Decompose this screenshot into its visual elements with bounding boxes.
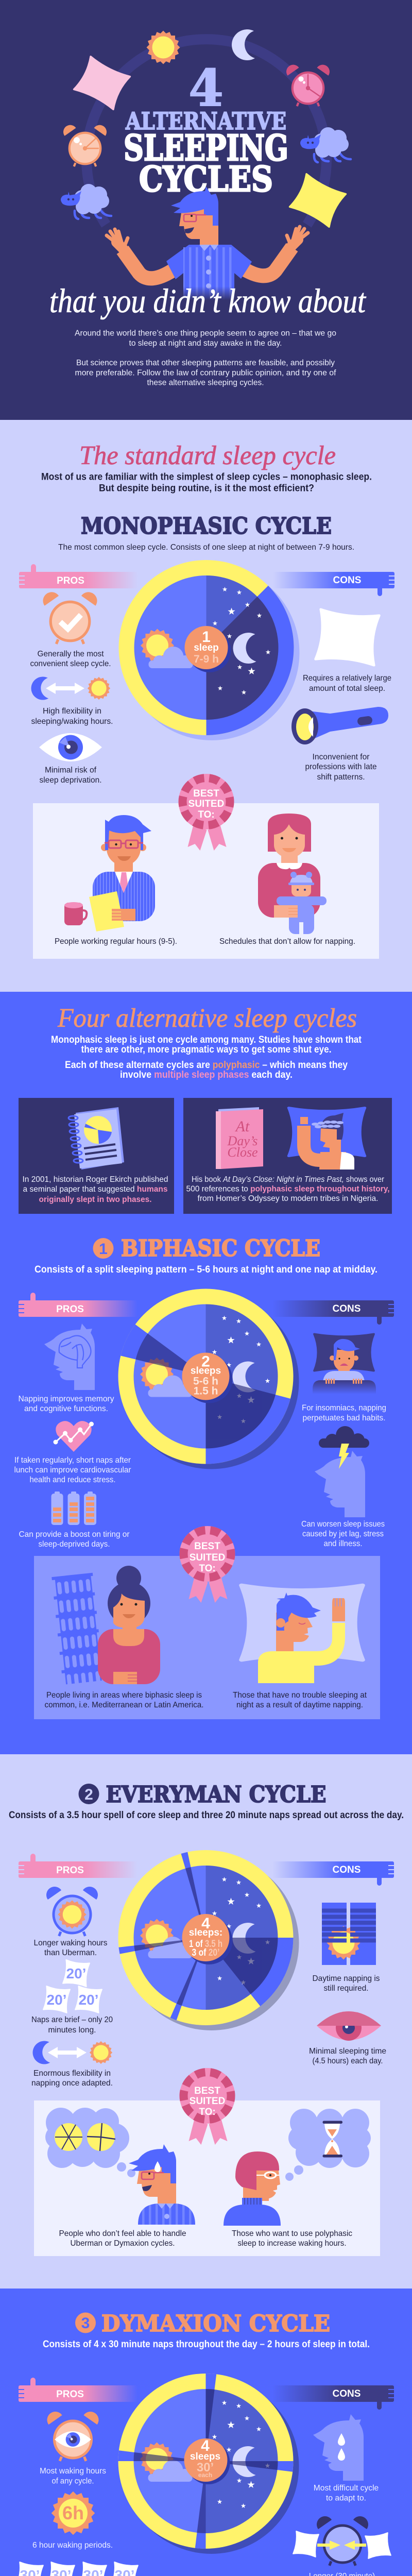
- pros bar: [19, 2378, 138, 2402]
- con: jet lag: caused by jet lag, stress: [302, 1530, 384, 1538]
- con: minimal sleeping time: Minimal sleeping time: [309, 2047, 386, 2056]
- con: minimal sleeping time: [309, 2011, 386, 2065]
- cons bar: CONS: [333, 1865, 360, 1875]
- icon: notebook: [68, 1107, 124, 1170]
- cons bar: CONS: [333, 575, 361, 586]
- icon: sheep right: [300, 127, 351, 162]
- icon: sun: [146, 30, 180, 64]
- pro: flexibility: Enormous flexibility in: [33, 2069, 111, 2078]
- title: ALTERNATIVE: [125, 107, 286, 135]
- con: most difficult: Most difficult cycle: [314, 2484, 379, 2493]
- intro text: these alternative sleeping cycles.: [147, 378, 264, 387]
- person: anxious man with thought: Uberman or Dymaxion cycles.: [70, 2239, 175, 2248]
- person: office worker: [55, 815, 177, 946]
- intro text: more preferable. Follow the law of contrary public opinion, and try one of: [75, 369, 336, 377]
- wheel: monophasic: 1: [202, 629, 211, 646]
- wheel: everyman: 3 of 20’: [192, 1947, 219, 1958]
- wheel: biphasic: sleeps: [191, 1365, 221, 1377]
- heading: The standard sleep cycle: [79, 441, 336, 470]
- intro text: to sleep at night and stay awake in the day.: [129, 339, 282, 348]
- icon: book: Day’s: [227, 1133, 258, 1148]
- panel: Roger Ekirch: originally slept in two phases.: [39, 1195, 151, 1204]
- con: daytime napping: [312, 1903, 380, 1993]
- pro: four naps: [16, 2562, 138, 2576]
- con: late shifts: professions with late: [305, 762, 377, 771]
- person: woman with hourglass thought: [224, 2109, 371, 2248]
- wheel: dymaxion: [118, 2374, 299, 2554]
- wheel: monophasic: [118, 560, 300, 740]
- cycle description: Consists of a split sleeping pattern – 5-6 hours at night and one nap at midday.: [35, 1264, 377, 1275]
- intro text: But science proves that other sleeping patterns are feasible, and possibly: [76, 359, 335, 367]
- pro: brief naps: 20’: [66, 1965, 86, 1981]
- pro: brief naps: 20’: [79, 1992, 98, 2008]
- heading: Four alternative sleep cycles: [57, 1004, 357, 1033]
- wheel: dymaxion: 30’: [197, 2461, 214, 2475]
- panel: Roger Ekirch: a seminal paper that suggested humans: [23, 1185, 168, 1194]
- cons bar: CONS: [333, 2388, 360, 2399]
- wheel: dymaxion: sleeps: [190, 2451, 220, 2462]
- cons bar: [272, 2385, 394, 2410]
- pro: convenient: Generally the most: [37, 650, 104, 658]
- person: sleeping man: [233, 1585, 367, 1709]
- wheel: everyman: [118, 1850, 299, 2030]
- pro: six hour periods: 6 hour waking periods.: [32, 2541, 113, 2550]
- badge: best suited: BEST: [194, 2086, 220, 2096]
- pro: flexibility: sleeping/waking hours.: [31, 717, 113, 726]
- con: jet lag: and illness.: [323, 1539, 363, 1548]
- badge: best suited: BEST: [193, 788, 219, 799]
- con: insomniacs: [302, 1334, 386, 1422]
- person: Mediterranean woman and tower: [44, 1566, 204, 1709]
- intro text: [75, 329, 336, 387]
- badge: best suited: SUITED: [188, 799, 224, 809]
- pro: boost: Can provide a boost on tiring or: [19, 1530, 130, 1539]
- cycle title: everyman: 2: [84, 1786, 93, 1803]
- intro text: [41, 472, 372, 494]
- title: [124, 59, 288, 199]
- wheel: biphasic: 5-6 h: [193, 1376, 218, 1387]
- pro: most waking hours: [40, 2409, 106, 2485]
- pro: minimal risk: sleep deprivation.: [39, 776, 102, 785]
- panel: At Day's Close: 500 references to polyphasic sleep throughout history,: [186, 1185, 389, 1193]
- icon: book: Close: [227, 1145, 258, 1160]
- badge: best suited: BEST: [194, 1541, 220, 1552]
- section: alternative cycles and biphasic: [0, 992, 412, 1754]
- icon: pink alarm clock: [284, 62, 332, 107]
- person: woman with hourglass thought: Those who want to use polyphasic: [232, 2229, 352, 2238]
- pro: heart health: If taken regularly, short naps after: [14, 1456, 131, 1465]
- intro text: But despite being routine, is it the most efficient?: [99, 483, 314, 494]
- badge: best suited: [179, 1526, 235, 1603]
- con: jet lag: [301, 1426, 385, 1548]
- pro: longer waking hours: [34, 1884, 107, 1957]
- badge: best suited: TO:: [199, 1563, 216, 1574]
- title: 4: [188, 59, 224, 117]
- icon: sleeping Greek on pillow: [289, 1108, 365, 1170]
- intro text: involve multiple sleep phases each day.: [120, 1070, 293, 1080]
- subtitle: that you didn’t know about: [49, 282, 366, 320]
- cons bar: CONS: [333, 1303, 360, 1314]
- con: late shifts: [291, 707, 388, 782]
- pro: longer waking hours: than Uberman.: [44, 1948, 97, 1957]
- panel: At Day's Close: His book At Day’s Close: Night in Times Past, shows over: [192, 1175, 385, 1184]
- illustration: juggling man: [107, 187, 308, 300]
- intro text: Monophasic sleep is just one cycle among many. Studies have shown that: [51, 1035, 362, 1045]
- icon: pink pillow: [74, 57, 130, 109]
- cycle title: biphasic: 1: [99, 1241, 108, 1258]
- intro text: Around the world there’s one thing people seem to agree on – that we go: [75, 329, 336, 338]
- con: late shifts: Inconvenient for: [312, 753, 370, 761]
- wheel: everyman: 4: [201, 1915, 210, 1932]
- pro: six hour periods: [32, 2492, 113, 2550]
- badge: best suited: [179, 2068, 235, 2145]
- badge: best suited: TO:: [199, 2107, 216, 2117]
- pros bar: PROS: [57, 575, 84, 586]
- section: dymaxion: [0, 2289, 412, 2576]
- panel: Roger Ekirch: [19, 1098, 174, 1214]
- wheel: monophasic: 7-9 h: [194, 653, 219, 665]
- pro: flexibility: [31, 677, 113, 726]
- con: insomniacs: perpetuates bad habits.: [303, 1414, 385, 1422]
- wheel: biphasic: 1.5 h: [194, 1385, 218, 1397]
- panel: best suited: [34, 1556, 380, 1719]
- person: Mediterranean woman and tower: People living in areas where biphasic sleep is: [46, 1691, 202, 1700]
- cycle description: Consists of 4 x 30 minute naps throughout the day – 2 hours of sleep in total.: [43, 2339, 370, 2350]
- intro text: there are other, more pragmatic ways to get some shut eye.: [81, 1044, 332, 1055]
- icon: yellow pillow: [290, 174, 346, 227]
- pro: brief naps: minutes long.: [48, 2026, 96, 2035]
- panel: best suited: [33, 803, 379, 959]
- badge: best suited: TO:: [198, 809, 215, 820]
- person: anxious man with thought: [45, 2108, 195, 2248]
- con: daytime napping: Daytime napping is: [312, 1974, 380, 1983]
- con: large amount: [303, 609, 391, 693]
- con: daytime napping: still required.: [323, 1984, 369, 1993]
- pro: boost: [19, 1492, 130, 1549]
- pro: brief naps: Naps are brief – only 20: [31, 2015, 113, 2024]
- intro text: Most of us are familiar with the simplest of sleep cycles – monophasic sleep.: [41, 472, 372, 482]
- pro: heart health: health and reduce stress.: [30, 1476, 115, 1484]
- cycle title: dymaxion: DYMAXION CYCLE: [101, 2311, 330, 2337]
- pro: heart health: [14, 1421, 131, 1484]
- wheel: biphasic: 2: [201, 1353, 210, 1370]
- cycle title: MONOPHASIC CYCLE: [81, 513, 332, 539]
- person: anxious man with thought: People who don’t feel able to handle: [59, 2229, 186, 2238]
- pro: longer waking hours: Longer waking hours: [34, 1939, 107, 1947]
- con: most difficult: to adapt to.: [326, 2494, 366, 2503]
- pro: most waking hours: of any cycle.: [52, 2477, 94, 2485]
- intro text: Each of these alternate cycles are polyphasic – which means they: [65, 1060, 348, 1071]
- pro: convenient: convenient sleep cycle.: [30, 659, 111, 668]
- pro: memory: [19, 1324, 114, 1413]
- pro: memory: Napping improves memory: [19, 1395, 114, 1403]
- pro: memory: and cognitive functions.: [24, 1404, 108, 1413]
- person: office worker: People working regular hours (9-5).: [55, 937, 177, 946]
- pro: flexibility: napping once adapted.: [31, 2079, 113, 2088]
- cons bar: [272, 1861, 394, 1886]
- cycle title: biphasic: BIPHASIC CYCLE: [121, 1235, 320, 1262]
- person: Mediterranean woman and tower: common, i.e. Mediterranean or Latin America.: [44, 1701, 204, 1709]
- badge: best suited: [178, 774, 234, 851]
- pro: convenient: [30, 589, 111, 668]
- con: jet lag: Can worsen sleep issues: [301, 1520, 385, 1529]
- wheel: dymaxion: each: [198, 2471, 212, 2479]
- icon: moon: [232, 29, 255, 60]
- pro: six hour periods: 6h: [62, 2502, 84, 2523]
- panel: Roger Ekirch: In 2001, historian Roger Ekirch published: [23, 1175, 168, 1184]
- section: standard sleep cycle: [0, 420, 412, 992]
- person: mother with baby: Schedules that don’t allow for napping.: [219, 937, 355, 946]
- wheel: everyman: 1 of 3.5 h: [189, 1939, 222, 1950]
- pro: heart health: lunch can improve cardiovascular: [14, 1466, 131, 1475]
- icon: book: At: [235, 1118, 250, 1135]
- con: large amount: Requires a relatively large: [303, 674, 391, 683]
- pros bar: PROS: [56, 1304, 84, 1315]
- wheel: dymaxion: 4: [201, 2437, 210, 2454]
- person: mother with baby: [219, 814, 355, 946]
- pros bar: PROS: [56, 1865, 84, 1876]
- pro: boost: sleep-deprived days.: [38, 1540, 110, 1549]
- title: SLEEPING: [124, 128, 288, 169]
- icon: orange alarm clock: [61, 122, 109, 167]
- pro: minimal risk: [39, 733, 102, 785]
- pros bar: PROS: [56, 2389, 84, 2400]
- panel: best suited: [34, 2100, 380, 2256]
- ring of day and night: [87, 39, 327, 225]
- con: late shifts: shift patterns.: [317, 773, 365, 782]
- panel: At Day's Close: [183, 1098, 392, 1214]
- person: sleeping man: Those that have no trouble sleeping at: [233, 1691, 367, 1700]
- panel: At Day's Close: from Homer’s Odyssey to modern tribes in Nigeria.: [198, 1194, 378, 1203]
- pro: brief naps: 20’: [47, 1992, 66, 2008]
- person: sleeping man: night as a result of daytime napping.: [236, 1701, 363, 1709]
- con: large amount: amount of total sleep.: [309, 684, 385, 693]
- section: header: [0, 0, 412, 420]
- person: woman with hourglass thought: sleep to increase waking hours.: [238, 2239, 346, 2248]
- wheel: monophasic: sleep: [194, 642, 219, 653]
- cycle title: dymaxion: 3: [81, 2315, 90, 2332]
- pros bar: [19, 564, 138, 588]
- icon: sheep left: [61, 184, 111, 219]
- pro: flexibility: High flexibility in: [43, 707, 101, 716]
- cycle title: everyman: EVERYMAN CYCLE: [106, 1782, 327, 1808]
- pro: minimal risk: Minimal risk of: [45, 766, 97, 775]
- wheel: everyman: sleeps:: [189, 1927, 222, 1938]
- title: CYCLES: [139, 159, 273, 199]
- icon: book: [216, 1107, 263, 1169]
- cons bar: [273, 572, 394, 596]
- cons bar: [272, 1300, 394, 1325]
- intro text: [51, 1035, 362, 1080]
- badge: best suited: SUITED: [190, 1552, 225, 1563]
- pro: brief naps: [31, 1960, 113, 2035]
- con: most difficult: [313, 2414, 379, 2503]
- pro: most waking hours: Most waking hours: [40, 2467, 106, 2476]
- wheel: biphasic: [118, 1289, 299, 1469]
- pros bar: [19, 1854, 138, 1878]
- con: minimal sleeping time: (4.5 hours) each day.: [312, 2057, 383, 2065]
- badge: best suited: SUITED: [190, 2096, 225, 2107]
- pros bar: [19, 1293, 138, 1317]
- section: everyman: [0, 1754, 412, 2289]
- con: longer naps: [293, 2513, 391, 2576]
- con: insomniacs: For insomniacs, napping: [302, 1403, 386, 1413]
- cycle description: The most common sleep cycle. Consists of one sleep at night of between 7-9 hours.: [58, 543, 354, 552]
- pro: flexibility: [31, 2041, 113, 2088]
